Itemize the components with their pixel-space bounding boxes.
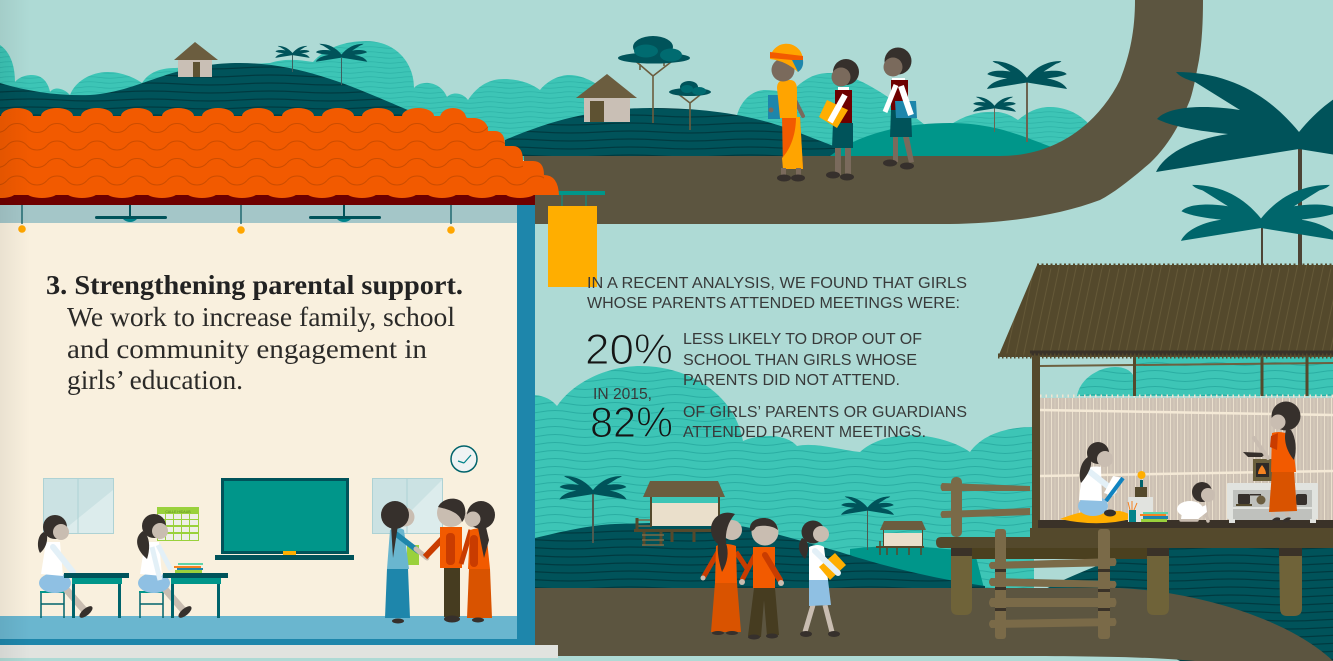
- figure: teacher in orange dress: [461, 501, 495, 622]
- icon: large palm trees: [1156, 72, 1333, 267]
- icon: classroom windows: [44, 478, 442, 534]
- figure: mother cooking: [1254, 402, 1300, 522]
- stat: 20% less likely: SCHOOL THAN GIRLS WHOSE: [683, 352, 917, 369]
- left edge shading: [0, 0, 30, 661]
- floor edge: [0, 639, 535, 645]
- wall: [0, 205, 517, 616]
- text block: engagement description: [67, 302, 455, 395]
- figure: father in orange shirt: [425, 499, 465, 622]
- text block: recent analysis intro: WHOSE PARENTS ATTENDED MEETINGS WERE:: [587, 295, 960, 312]
- stat: 20% less likely: [585, 326, 922, 389]
- figure: crawling baby: [1177, 482, 1215, 521]
- stat: 20% less likely: 20%: [585, 326, 673, 374]
- stat: 82% attended: ATTENDED PARENT MEETINGS.: [683, 424, 926, 441]
- icon: acacia trees: [618, 36, 711, 130]
- icon: small distant stilt hut: [876, 521, 926, 555]
- figure: woman in turban walking: [768, 44, 805, 182]
- figure: schoolgirl with blue book: [883, 48, 917, 170]
- stat: 82% attended: IN 2015,: [593, 386, 652, 403]
- figure: seated girl at desk, right: [137, 514, 228, 620]
- winding road, upper: [524, 0, 1203, 224]
- stat: 82% attended: OF GIRLS’ PARENTS OR GUARDIANS: [683, 404, 967, 421]
- icon: kitchen cabinet with pots and stove: [1227, 452, 1318, 523]
- icon: small house on hill: [174, 42, 218, 77]
- heading: strengthening parental support: 3. Strengthening parental support.: [46, 270, 463, 300]
- deck: [936, 528, 1333, 548]
- text block: recent analysis intro: [587, 275, 967, 312]
- stat: 20% less likely: LESS LIKELY TO DROP OUT OF: [683, 331, 922, 348]
- lower landscape: hills: [535, 357, 1333, 661]
- stilt house: [936, 265, 1333, 616]
- roof beams: [1040, 363, 1333, 366]
- stat: 82% attended: 82%: [590, 399, 673, 447]
- icon: palm in lower valley: [559, 476, 627, 543]
- stat: 20% less likely: PARENTS DID NOT ATTEND.: [683, 372, 900, 389]
- icon: second palm in valley: [841, 496, 894, 550]
- ladder: [989, 529, 1116, 639]
- icon: palms on left hill: [275, 44, 367, 85]
- base step: [0, 645, 558, 658]
- icon: lamp on side table with books: [1128, 471, 1168, 522]
- ceiling band: [0, 205, 517, 223]
- stilts: [951, 548, 972, 615]
- thatched roof: [998, 265, 1333, 357]
- icon: hanging orange banner: [548, 191, 605, 287]
- bamboo wall: [1040, 398, 1333, 520]
- text block: engagement description: girls’ education.: [67, 365, 243, 395]
- corner post: [1032, 357, 1040, 537]
- icon: ceiling bulbs: [18, 205, 455, 234]
- figure: mother in blue shaking hands: [381, 501, 427, 624]
- upper landscape: hills behind the road: [0, 41, 1092, 160]
- icon: wall clock: [451, 446, 477, 472]
- figure: seated girl at desk, left: [38, 515, 129, 620]
- floor: [0, 616, 517, 640]
- icon: palms on the right of the road: [973, 61, 1067, 142]
- figure: mother in long orange dress walking: [700, 513, 748, 635]
- classroom panel: [0, 205, 558, 658]
- figure: father in orange shirt walking: [739, 518, 784, 640]
- figure: girl reading on cushion: [1060, 442, 1134, 523]
- figure: schoolgirl with orange book: [819, 59, 859, 180]
- icon: distant stilt hut: [634, 481, 725, 546]
- text block: recent analysis intro: IN A RECENT ANALYSIS, WE FOUND THAT GIRLS: [587, 275, 967, 292]
- stat: 82% attended: [590, 386, 967, 447]
- icon: wall calendar: CALLE HIDAUB: [165, 510, 191, 514]
- icon: ceiling fans: [95, 205, 381, 222]
- winding road, lower: [535, 588, 1333, 661]
- text block: engagement description: and community engagement in: [67, 334, 428, 364]
- icon: wall calendar: [157, 507, 199, 541]
- icon: house on the middle hill: [576, 74, 637, 122]
- figure: schoolgirl walking with book: [799, 520, 846, 637]
- roof tiles: [0, 108, 559, 205]
- text block: engagement description: We work to increase family, school: [67, 302, 455, 332]
- icon: blackboard: [215, 480, 354, 560]
- right wall pillar: [517, 205, 535, 645]
- railing: [940, 477, 1030, 537]
